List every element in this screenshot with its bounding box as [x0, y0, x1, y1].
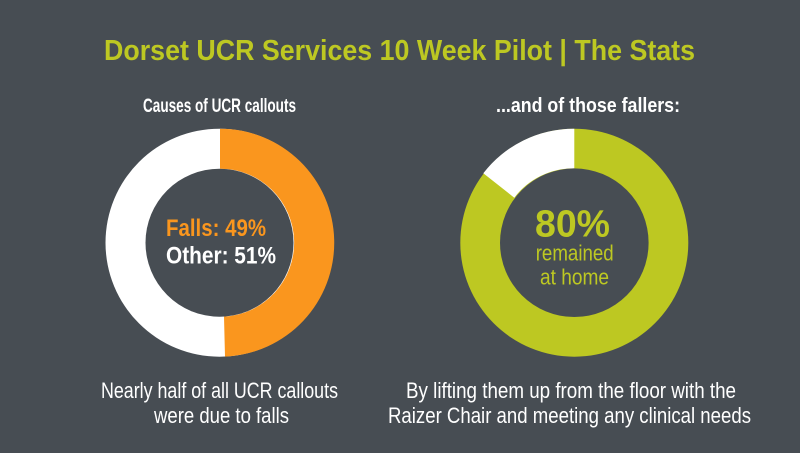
donut chart: causes of callouts: [106, 129, 334, 357]
caption: left: were due to falls: [153, 403, 289, 428]
label: falls 49%: Falls: 49%: [166, 215, 266, 242]
heading: and of those fallers: ...and of those fallers:: [496, 95, 680, 117]
stat: 80%: 80%: [535, 204, 610, 246]
caption: right: [388, 378, 751, 428]
label: at home: at home: [540, 265, 609, 290]
label: remained: remained: [536, 241, 614, 266]
caption: right: By lifting them up from the floor with the: [406, 378, 736, 403]
caption: left: [101, 378, 338, 428]
label: other 51%: Other: 51%: [166, 242, 276, 270]
caption: left: Nearly half of all UCR callouts: [101, 378, 338, 403]
title: Dorset UCR Services 10 Week Pilot | The Stats: [104, 35, 695, 67]
heading: causes of UCR callouts: Causes of UCR callouts: [143, 95, 296, 117]
donut chart: remained at home: [460, 129, 688, 357]
